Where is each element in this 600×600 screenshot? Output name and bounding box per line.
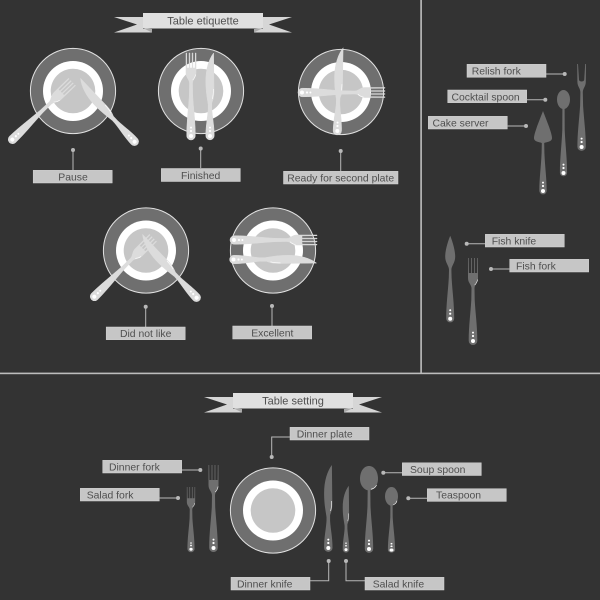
label: Fish knife: Fish knife (492, 236, 536, 248)
dinner plate (230, 468, 316, 553)
label: Relish fork: Relish fork (472, 66, 522, 78)
label: Soup spoon: Soup spoon (410, 465, 466, 476)
label: Dinner plate (270, 427, 369, 459)
plate: Pause (6, 48, 140, 147)
label: Ready for second plate: Ready for second plate (287, 174, 394, 184)
label: Finished: Finished (181, 171, 221, 182)
label: Dinner fork: Dinner fork (109, 462, 161, 474)
label: Salad knife: Salad knife (373, 580, 424, 590)
cake server (534, 111, 552, 194)
dinner knife (324, 465, 332, 552)
label: Cake server: Cake server (432, 118, 489, 130)
label: Did not like: Did not like (120, 329, 172, 340)
soup spoon (360, 466, 378, 553)
label: Finished (161, 146, 240, 182)
panel: serving utensils (428, 64, 589, 345)
label: Fish fork (489, 259, 589, 272)
label: Excellent: Excellent (251, 328, 293, 340)
plate: Ready for second plate (298, 48, 385, 135)
label: Did not like (106, 305, 185, 340)
label: Dinner knife: Dinner knife (237, 580, 293, 590)
label: Teaspoon (406, 489, 506, 502)
label: Fish knife (465, 234, 564, 248)
label: Pause: Pause (58, 172, 88, 184)
label: Dinner knife (231, 559, 331, 590)
salad fork (187, 487, 195, 552)
panel: table etiquette (6, 13, 398, 340)
plate: Did not like (88, 208, 202, 303)
fish fork (468, 258, 478, 345)
label: Salad knife (344, 559, 444, 590)
plate: Excellent (230, 208, 317, 293)
panel: table setting (80, 393, 506, 590)
label: Cake server (428, 116, 528, 130)
heading banner: Table setting (204, 393, 382, 412)
label: Cocktail spoon (448, 90, 547, 104)
label: Relish fork (467, 64, 567, 78)
label: Soup spoon (381, 463, 481, 476)
heading banner: Table etiquette (114, 13, 292, 32)
teaspoon (385, 487, 398, 553)
label: Dinner plate: Dinner plate (297, 430, 353, 440)
label: Salad fork: Salad fork (87, 490, 134, 502)
label: Pause (33, 148, 112, 184)
plate: Finished (158, 48, 244, 140)
fish knife (445, 236, 455, 322)
heading banner: Table etiquette: Table etiquette (167, 16, 239, 28)
heading banner: Table setting: Table setting (262, 396, 324, 408)
label: Cocktail spoon: Cocktail spoon (452, 92, 520, 104)
label: Ready for second plate (284, 149, 398, 184)
label: Excellent (233, 304, 312, 340)
salad knife (343, 486, 349, 553)
label: Salad fork (80, 488, 180, 502)
label: Dinner fork (103, 460, 202, 474)
relish fork (577, 64, 586, 151)
label: Fish fork: Fish fork (516, 262, 557, 272)
dinner fork (208, 465, 218, 552)
cocktail spoon (557, 90, 570, 176)
label: Teaspoon: Teaspoon (436, 491, 481, 502)
